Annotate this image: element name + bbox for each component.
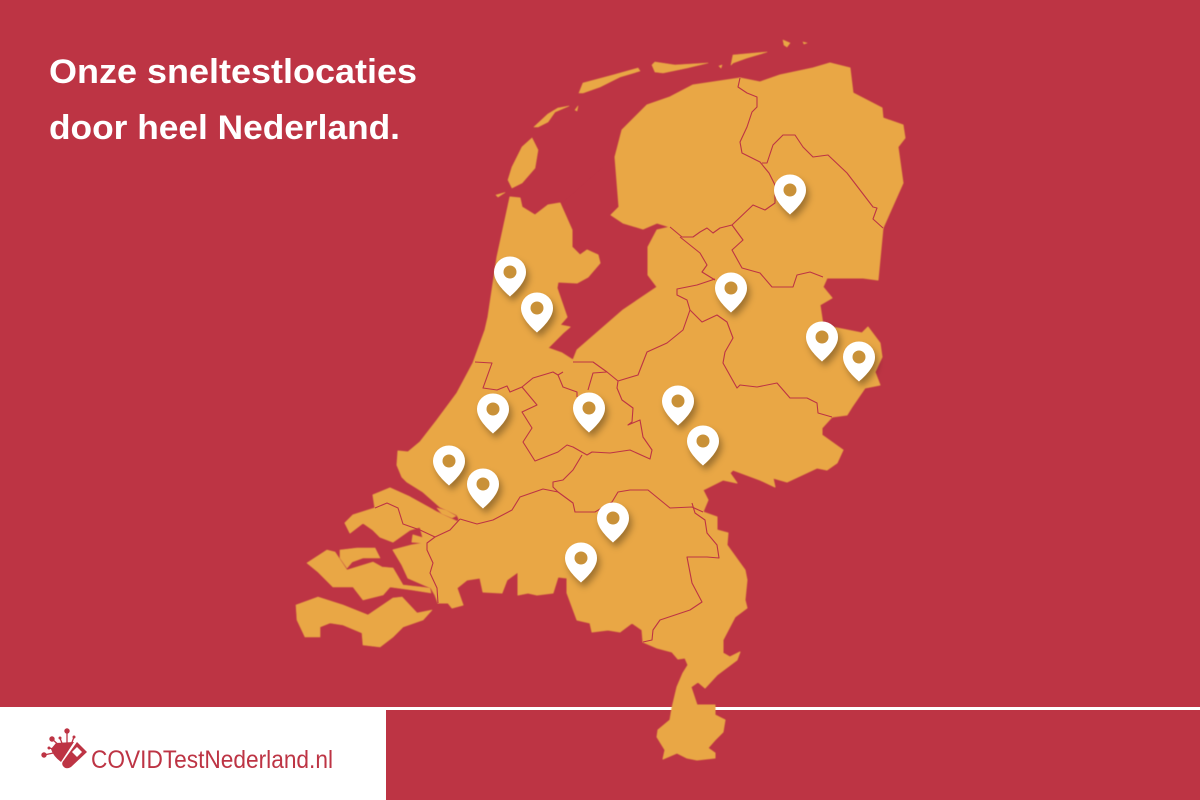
title: Onze sneltestlocaties <box>49 53 417 91</box>
islands and Zeeland <box>296 40 807 647</box>
logo icon <box>41 728 87 768</box>
logo wordmark: COVIDTestNederland.nl <box>91 746 333 774</box>
pin: Utrecht <box>573 392 605 432</box>
logo panel <box>0 707 386 800</box>
footer divider line <box>386 707 1200 710</box>
title: door heel Nederland. <box>49 109 400 147</box>
pin: Gelderland 1 <box>662 386 694 426</box>
title <box>49 53 417 147</box>
location pins <box>433 174 875 582</box>
land shapes <box>345 63 905 760</box>
pin: Zuid-Holland north <box>477 394 509 434</box>
pin: Twente 1 <box>806 322 838 362</box>
province borders <box>375 78 883 642</box>
pin: Noord-Brabant east <box>597 502 629 542</box>
pin: Zuid-Holland west <box>433 446 465 486</box>
pin: Gelderland 2 <box>687 426 719 466</box>
map: Netherlands <box>296 40 905 760</box>
pin: Twente 2 <box>843 342 875 382</box>
pin: Noord-Holland 2 <box>521 292 553 332</box>
pin: Overijssel north <box>715 272 747 312</box>
pin: Zuid-Holland south <box>467 468 499 508</box>
pin: Noord-Brabant west <box>565 542 597 582</box>
pin: Noord-Holland 1 <box>494 256 526 296</box>
pin: Groningen/Drenthe <box>774 174 806 214</box>
